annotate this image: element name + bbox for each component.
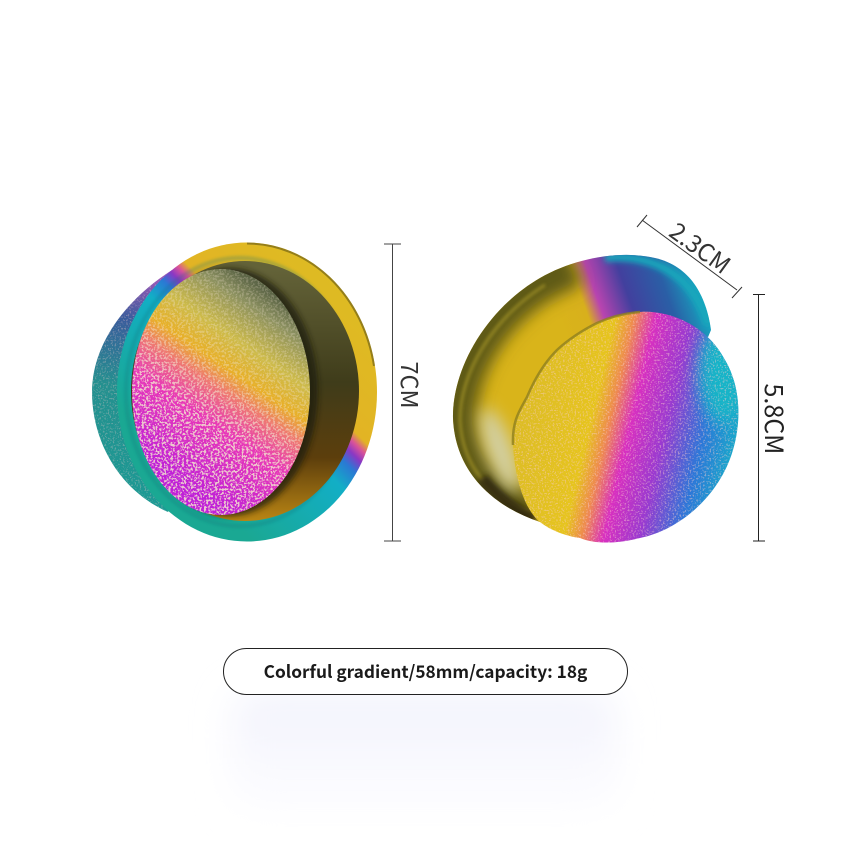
speckle on filter base	[513, 312, 738, 543]
dimension: 7CM: 7CM	[394, 361, 428, 409]
spec label pill	[224, 648, 628, 694]
infographic canvas	[92, 214, 784, 744]
dimension: 7CM	[384, 244, 428, 541]
rim outer dark edge	[118, 244, 376, 540]
olive lip and highlights of flange	[453, 257, 708, 520]
filter base of right basket	[513, 312, 738, 543]
rim of left basket	[117, 242, 377, 542]
dimension: 2.3CM: 2.3CM	[663, 212, 739, 281]
dimension: 2.3CM	[637, 212, 742, 298]
speckle on inner disk	[132, 269, 310, 515]
product: basket viewed from the filter side	[453, 255, 751, 543]
dimension: 5.8CM	[753, 294, 793, 541]
outer wall of left basket	[92, 270, 200, 512]
product: basket viewed from the open side	[92, 242, 377, 542]
rim inner groove	[126, 258, 354, 526]
base edge highlight	[513, 312, 640, 445]
shadow behind inner disk	[140, 268, 318, 516]
teal glow on base edge	[699, 320, 751, 424]
dimension: 5.8CM: 5.8CM	[757, 384, 793, 454]
soft shadow below label	[232, 692, 617, 810]
flange of right basket	[453, 255, 711, 522]
inner filter disk	[132, 269, 310, 515]
spec label pill: Colorful gradient/58mm/capacity: 18g	[264, 658, 588, 683]
speckle on outer wall	[92, 270, 200, 512]
cavity of left basket	[131, 261, 359, 521]
